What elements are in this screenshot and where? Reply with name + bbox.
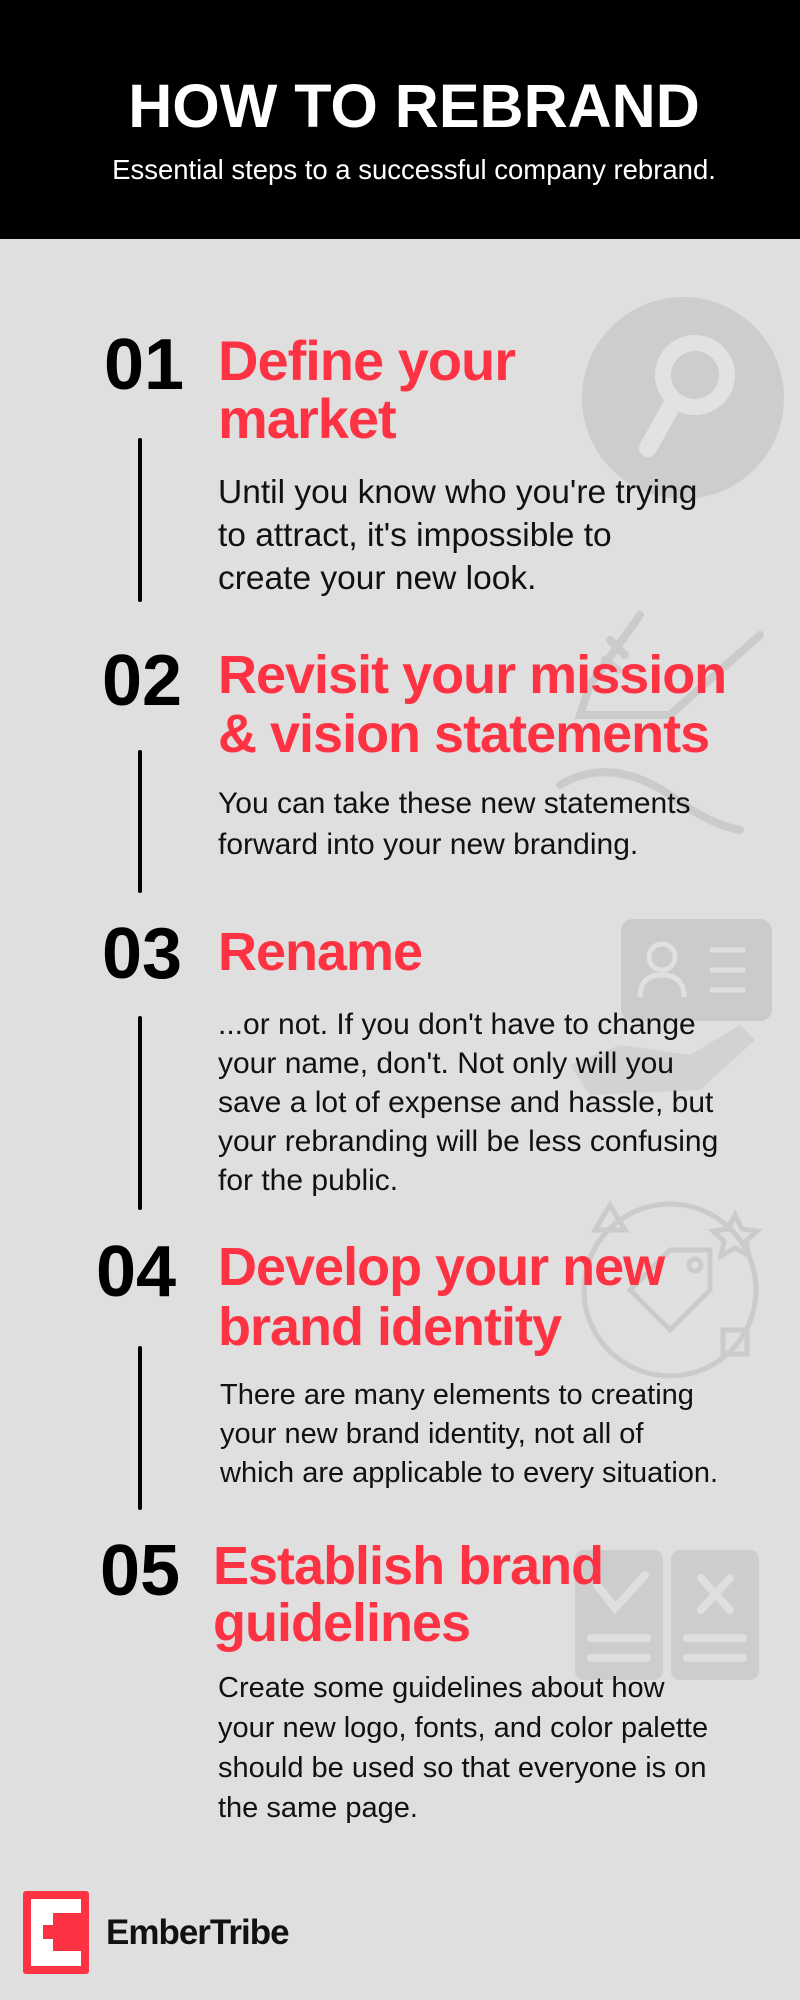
- subtitle: Essential steps to a successful company rebrand.: [112, 154, 716, 185]
- body 04: There are many elements to creating: [220, 1379, 694, 1411]
- body 03: your name, don't. Not only will you: [218, 1047, 674, 1080]
- number 03: 03: [102, 914, 182, 994]
- timeline line 02: [138, 750, 142, 893]
- number 02: 02: [102, 641, 182, 721]
- timeline line 03: [138, 1016, 142, 1210]
- step 01: [104, 325, 697, 602]
- body 03: for the public.: [218, 1164, 398, 1197]
- heading 04: brand identity: [218, 1297, 561, 1357]
- body 05: [218, 1672, 708, 1824]
- icon: brand tag: [582, 1200, 762, 1378]
- heading 05: Establish brand: [213, 1536, 603, 1596]
- step 04: [96, 1232, 718, 1510]
- body 05: your new logo, fonts, and color palette: [218, 1712, 708, 1744]
- heading 05: guidelines: [213, 1593, 470, 1653]
- heading 01: [218, 329, 516, 450]
- body 02: You can take these new statements: [218, 787, 691, 820]
- step 03: [102, 914, 718, 1210]
- heading 01: Define your: [218, 329, 515, 392]
- heading 05: [213, 1536, 603, 1653]
- body 03: save a lot of expense and hassle, but: [218, 1086, 713, 1119]
- header: [0, 0, 800, 239]
- body 05: the same page.: [218, 1792, 418, 1824]
- icon: magnifier: [582, 297, 784, 499]
- body 03: your rebranding will be less confusing: [218, 1125, 718, 1158]
- body 05: should be used so that everyone is on: [218, 1752, 706, 1784]
- heading 02: Revisit your mission: [218, 645, 726, 705]
- body 03: [218, 1008, 718, 1197]
- heading 03: Rename: [218, 922, 422, 982]
- body 01: create your new look.: [218, 560, 536, 597]
- body 01: Until you know who you're trying: [218, 474, 697, 511]
- body 01: to attract, it's impossible to: [218, 517, 612, 554]
- number 01: 01: [104, 325, 184, 405]
- number 04: 04: [96, 1232, 176, 1312]
- body 04: which are applicable to every situation.: [220, 1457, 718, 1489]
- icon: ID card: [570, 919, 772, 1095]
- heading 02: [218, 645, 726, 764]
- timeline line 04: [138, 1346, 142, 1510]
- body 02: forward into your new branding.: [218, 828, 638, 861]
- brand name: EmberTribe: [106, 1913, 289, 1952]
- step 02: [102, 641, 726, 893]
- timeline line 01: [138, 438, 142, 602]
- body 01: [218, 474, 697, 597]
- icon: pencil drawing: [556, 611, 764, 834]
- title: HOW TO REBRAND: [128, 72, 700, 140]
- body 02: [218, 787, 691, 861]
- heading 04: [218, 1237, 666, 1357]
- icon: do and don't cards: [575, 1550, 759, 1680]
- body 03: ...or not. If you don't have to change: [218, 1008, 696, 1041]
- heading 02: & vision statements: [218, 704, 709, 764]
- icon: E mark: [23, 1891, 89, 1974]
- heading 04: Develop your new: [218, 1237, 664, 1297]
- logo: EmberTribe: [23, 1891, 289, 1974]
- body 05: Create some guidelines about how: [218, 1672, 665, 1704]
- step 05: [100, 1531, 708, 1824]
- heading 01: market: [218, 387, 396, 450]
- body 04: your new brand identity, not all of: [220, 1418, 643, 1450]
- body 04: [220, 1379, 718, 1489]
- number 05: 05: [100, 1531, 180, 1611]
